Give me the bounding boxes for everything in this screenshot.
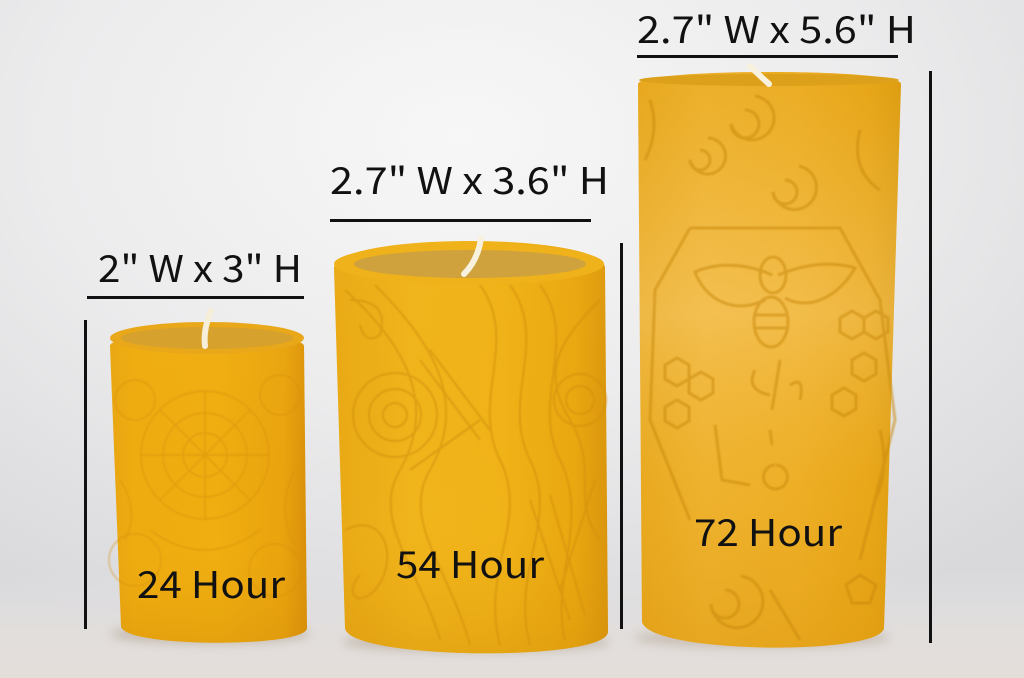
embossed bee and honeycomb pattern: large <box>645 96 895 640</box>
honeycomb <box>665 311 888 428</box>
burn time: small candle: 24 Hour <box>137 555 286 609</box>
dimension label: medium candle <box>330 151 609 222</box>
burn time: medium candle: 54 Hour <box>396 535 545 589</box>
height line: medium candle <box>620 243 623 629</box>
candle body: small <box>110 334 307 643</box>
candle top: medium <box>334 243 604 285</box>
script lettering <box>715 360 801 489</box>
candle body: medium <box>334 241 608 653</box>
candle: large 72 hour <box>634 66 901 648</box>
candle: small 24 hour <box>109 311 310 644</box>
embossed floral pattern: small <box>109 375 301 596</box>
height line: large candle <box>929 71 932 643</box>
burn time: large candle: 72 Hour <box>694 503 843 557</box>
height line: small candle <box>84 320 87 629</box>
candle body: large <box>638 72 901 648</box>
candle top: large <box>639 74 899 86</box>
dimension label: small candle: 2" W x 3" H <box>98 239 302 293</box>
dimension label: medium candle: 2.7" W x 3.6" H <box>330 151 609 205</box>
wick: large <box>750 66 769 84</box>
wick: small <box>205 311 211 346</box>
bee <box>695 264 855 306</box>
candle top: small <box>110 322 304 354</box>
wick: medium <box>464 238 481 274</box>
candle: medium 54 hour <box>334 238 610 653</box>
dimension label: large candle: 2.7" W x 5.6" H <box>637 0 916 54</box>
embossed paisley pattern: medium <box>345 285 606 645</box>
